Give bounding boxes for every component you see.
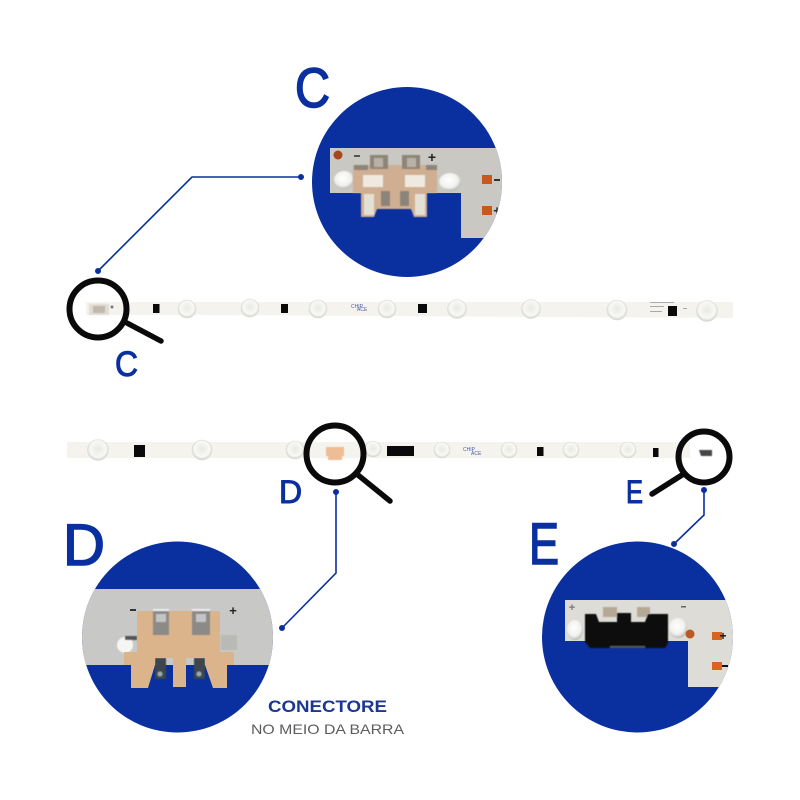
leader line D bbox=[280, 490, 338, 630]
black labels bottom bbox=[134, 445, 658, 457]
connector body D bbox=[124, 611, 234, 688]
magnifier D bbox=[306, 426, 390, 501]
magnifier E bbox=[652, 432, 730, 494]
polarity marks C: + bbox=[493, 203, 501, 218]
connector thumbnail D bbox=[326, 447, 344, 460]
LED lenses top bbox=[178, 299, 718, 322]
LED strip: top bbox=[86, 299, 733, 322]
magnifier C bbox=[70, 280, 161, 341]
polarity marks D: + bbox=[229, 603, 237, 618]
connector body E bbox=[585, 607, 668, 648]
pads and polarity marks E: + bbox=[719, 629, 727, 643]
strip logo top: CHIP bbox=[351, 304, 363, 310]
heading: big letter D: D bbox=[63, 513, 105, 578]
polarity marks C: + bbox=[428, 149, 436, 165]
solder dot E bbox=[686, 630, 694, 638]
solder dot C bbox=[334, 150, 342, 160]
connector body C bbox=[353, 155, 437, 217]
connector thumbnail C bbox=[89, 304, 113, 315]
label: small E: E bbox=[626, 474, 643, 510]
strip logo top: ACE bbox=[357, 307, 368, 313]
caption: connector: NO MEIO DA BARRA bbox=[251, 721, 405, 737]
connector pins D bbox=[155, 658, 205, 679]
panel: connector detail D bbox=[80, 542, 276, 732]
panel: connector detail C bbox=[312, 87, 510, 277]
LED lenses bottom bbox=[88, 440, 636, 460]
heading: big letter E: E bbox=[529, 512, 559, 577]
connector thumbnail E bbox=[699, 450, 712, 456]
polarity marks D bbox=[130, 607, 236, 614]
caption: connector: CONECTORE bbox=[268, 697, 387, 716]
caption: connector bbox=[251, 697, 405, 737]
PCB plate C bbox=[330, 148, 510, 238]
pads and polarity marks E: + bbox=[569, 602, 575, 614]
LED strip: bottom bbox=[67, 440, 712, 460]
heading: big letter C: C bbox=[295, 56, 330, 119]
metal terminals D bbox=[153, 609, 210, 635]
label: small D: D bbox=[279, 474, 302, 510]
LED bulbs C bbox=[334, 171, 461, 191]
leader line E bbox=[672, 488, 706, 546]
LED bulbs E bbox=[567, 618, 687, 640]
polarity marks C bbox=[354, 154, 500, 215]
leader line C bbox=[96, 175, 303, 273]
strip print top bbox=[650, 302, 687, 312]
pads and polarity marks E bbox=[569, 602, 728, 670]
strip logo bottom: ACE bbox=[471, 451, 482, 457]
strip logo bottom: CHIP bbox=[463, 447, 475, 453]
panel: connector detail E bbox=[542, 542, 740, 732]
black labels top bbox=[153, 304, 677, 316]
LED bulbs D bbox=[117, 635, 237, 653]
label: small C: C bbox=[115, 345, 138, 384]
PCB plate D bbox=[80, 589, 276, 665]
PCB plate E bbox=[565, 600, 740, 687]
